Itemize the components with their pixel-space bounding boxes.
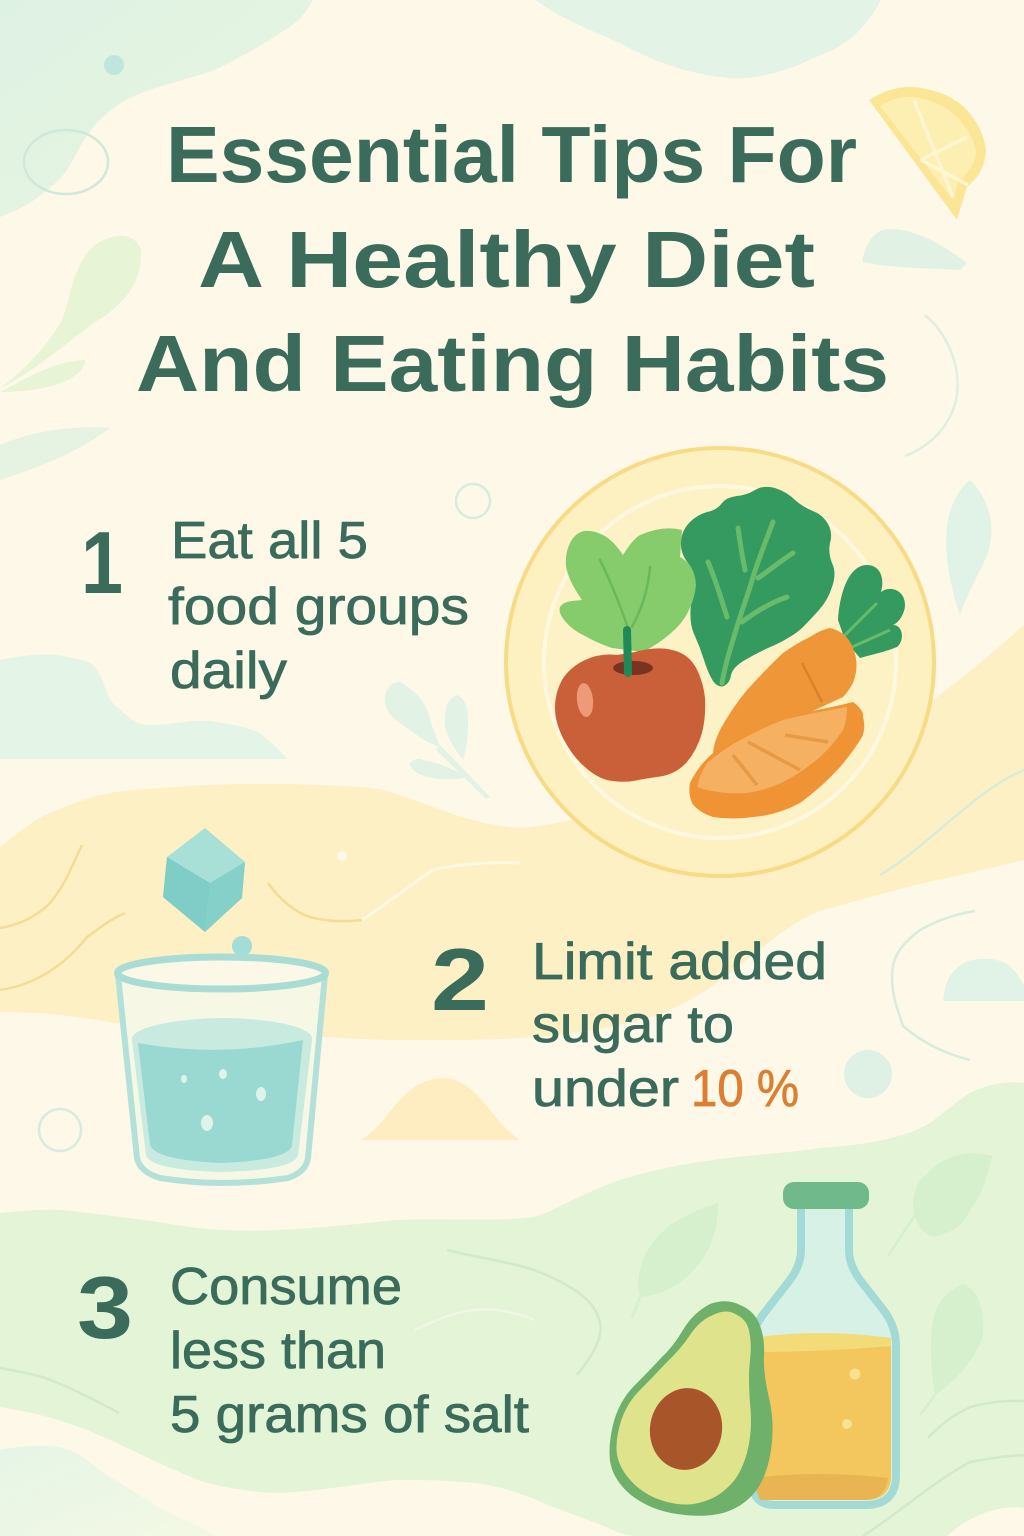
tip 2 number: 2 [431,930,489,1029]
tip 2 text [532,933,827,1118]
tip 2 text: 10 % [691,1060,799,1118]
title [136,110,889,408]
icon: avocado half [610,1301,773,1516]
tip 1 text: food groups [168,578,469,636]
faint leaves [638,1153,992,1395]
title: And Eating Habits [136,319,889,408]
icon: plate of fruit and vegetables [506,448,934,876]
title: Essential Tips For [166,110,857,199]
tip 2 text: Limit added [532,933,827,991]
icon: lemon slice [869,87,986,220]
tip 2 text: under [532,1060,679,1118]
tip 1 text: daily [170,642,287,700]
tip 3 number: 3 [77,1258,133,1357]
title: A Healthy Diet [198,215,815,304]
tip 1 text [168,512,469,700]
orange slice [689,702,864,818]
carrot [713,565,905,753]
icon: glass of water [118,957,326,1183]
small plant sprig [385,682,490,799]
tip 1 number: 1 [81,513,123,612]
tip 3 text: less than [170,1322,386,1380]
icon: oil bottle [752,1182,896,1505]
tip 1 text: Eat all 5 [171,512,368,570]
icon: sugar cube [163,828,252,956]
kale leaf [681,487,834,686]
plate [506,448,934,876]
apple [555,630,705,782]
tip 3 text [170,1258,530,1444]
tip 3 text: 5 grams of salt [170,1386,530,1444]
apple leaf [560,528,696,652]
tip 3 text: Consume [170,1258,402,1316]
tip 2 text: sugar to [532,996,734,1054]
